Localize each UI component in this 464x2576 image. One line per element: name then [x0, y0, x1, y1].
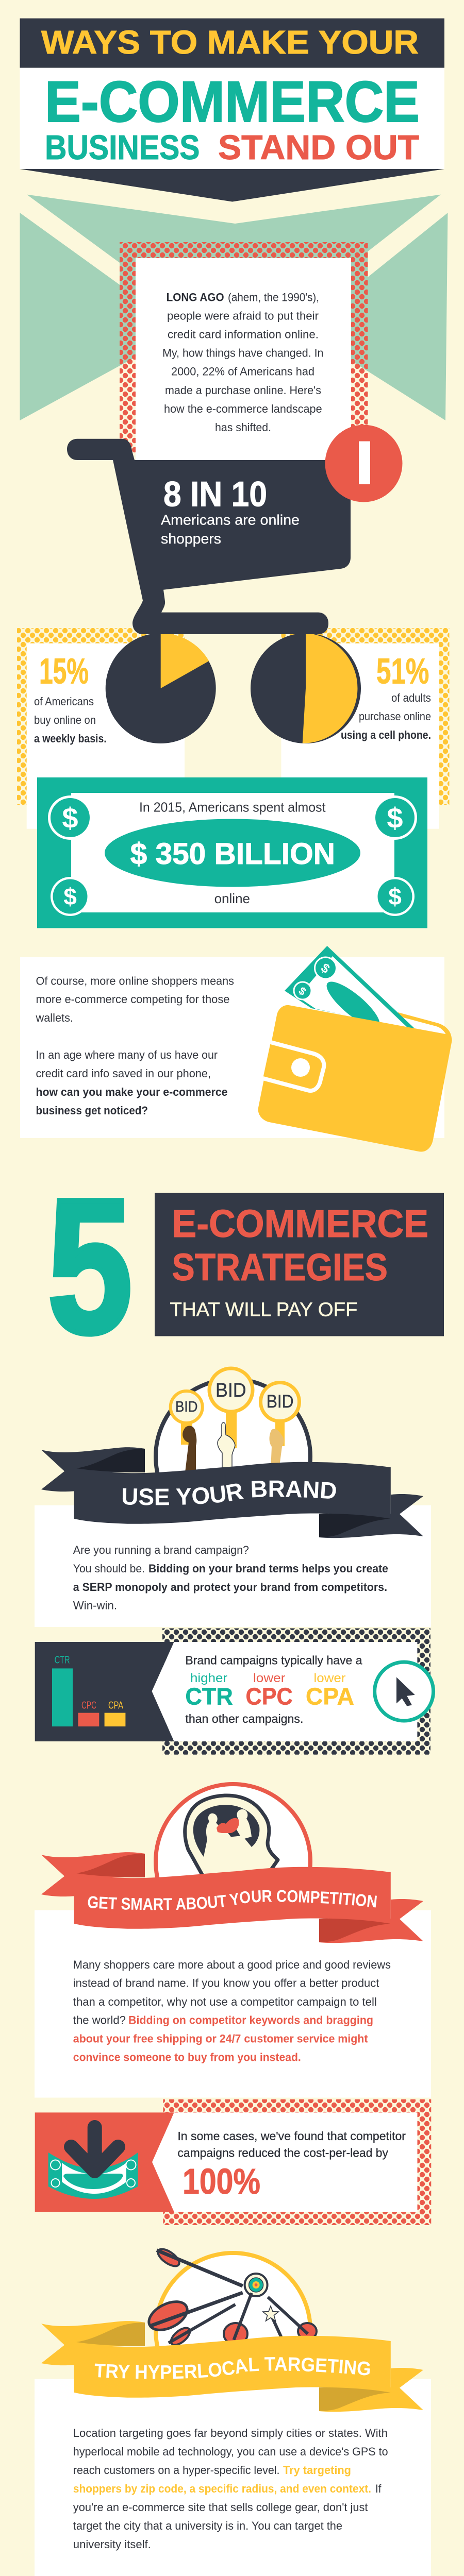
cart badge	[325, 425, 402, 502]
section 3 panel: hyperlocal: If	[375, 2482, 382, 2495]
stat: 51%: using a cell phone.	[341, 728, 431, 741]
icon: wallet with bill: $	[318, 960, 333, 976]
section 3 panel: hyperlocal: university itself.	[73, 2538, 151, 2551]
stat text: higher	[190, 1671, 227, 1685]
paddle: right: BID	[267, 1392, 294, 1412]
shopping cart	[67, 439, 351, 634]
bar chart: CPA	[108, 1700, 123, 1711]
section 3 ribbon	[41, 2321, 423, 2412]
section 1 panel: use your brand: a SERP monopoly and protect your brand from competitors.	[73, 1581, 387, 1594]
intro text: (ahem, the 1990's),	[228, 291, 319, 304]
stat text: lower	[313, 1671, 345, 1685]
arrows	[144, 2246, 317, 2348]
section 1 illustration: bid paddles	[156, 1368, 310, 1534]
stat text: than other campaigns.	[185, 1712, 303, 1725]
stat text	[185, 1654, 362, 1725]
section 1 panel: use your brand: Win-win.	[73, 1599, 117, 1612]
yellow dotted stat backdrop	[17, 628, 450, 829]
intro text: My, how things have changed. In	[162, 346, 324, 360]
numeral 5: 5	[47, 1159, 132, 1373]
corner seals: $	[387, 802, 403, 834]
heading: e-commerce strategies	[155, 1193, 444, 1336]
paragraph text: how can you make your e-commerce	[36, 1086, 228, 1098]
intro text: how the e-commerce landscape	[164, 402, 322, 415]
paddle: left	[171, 1391, 203, 1423]
section 1 ribbon	[41, 1447, 423, 1538]
section 2 illustration: head with couple	[156, 1784, 310, 1939]
ribbon title: TRY HYPERLOCAL TARGETING	[95, 2357, 370, 2379]
section 2 stat: 100%: In some cases, we've found that competitor	[177, 2129, 406, 2143]
paddle: right	[261, 1383, 299, 1421]
section 2 panel: get smart: instead of brand name. If you know you offer a better product	[73, 1976, 379, 1989]
dollar bill: $350 billion: online	[214, 891, 250, 906]
icon: wallet with bill	[258, 946, 452, 1152]
paddle: left: BID	[175, 1399, 198, 1415]
section 3 panel: hyperlocal: target the city that a university is in. You can target the	[73, 2519, 342, 2532]
corner seals: $	[388, 883, 402, 910]
section 3 illustration: arrows and target	[144, 2246, 317, 2408]
stat text: lower	[253, 1671, 285, 1685]
panel: more competition	[20, 957, 444, 1138]
bar chart: CPC	[81, 1700, 96, 1711]
dollar bill: $350 billion	[37, 777, 427, 928]
section 1 panel: use your brand: Are you running a brand campaign?	[73, 1544, 249, 1556]
stat text: Brand campaigns typically have a	[185, 1654, 362, 1667]
paragraph text: business get noticed?	[36, 1104, 148, 1117]
intro text: LONG AGO	[167, 291, 224, 304]
intro text: made a purchase online. Here's	[165, 384, 321, 397]
dollar bill: $350 billion: $ 350 BILLION	[130, 837, 335, 871]
stat: 15%: of Americans	[34, 695, 94, 708]
icon: cursor	[375, 1662, 434, 1721]
stat: 15%: 15%	[39, 651, 89, 691]
heading: e-commerce strategies: E-COMMERCE	[172, 1202, 428, 1245]
stat text: CPC	[245, 1683, 293, 1709]
paddle: middle: BID	[216, 1380, 246, 1401]
pie chart: 15%	[106, 633, 216, 743]
stat: 51%	[341, 651, 431, 741]
title line 1: WAYS TO MAKE YOUR	[41, 24, 419, 61]
paragraph text: In an age where many of us have our	[36, 1048, 218, 1061]
hands	[183, 1422, 284, 1472]
title line 2: E-COMMERCE	[45, 70, 420, 134]
corner seals: $	[63, 883, 77, 910]
intro text: 2000, 22% of Americans had	[171, 365, 314, 378]
section 2 panel: get smart: convince someone to buy from you instead.	[73, 2050, 301, 2063]
target	[245, 2274, 268, 2296]
section 2 panel: get smart: Many shoppers care more about a good price and good reviews	[73, 1958, 391, 1971]
title line 3b: STAND OUT	[218, 128, 419, 167]
cart caption	[161, 512, 300, 547]
section 2 panel: get smart: than a competitor, why not use a competitor campaign to tell	[73, 1995, 377, 2008]
stat: 15%	[34, 651, 107, 745]
stat text: CTR	[185, 1683, 233, 1709]
section 2 ribbon	[41, 1852, 423, 1943]
cart caption: shoppers	[161, 531, 221, 547]
green envelope ribbons	[20, 195, 448, 420]
section 3 panel: hyperlocal: reach customers on a hyper-specific level.	[73, 2464, 280, 2477]
paragraph text: more e-commerce competing for those	[36, 993, 230, 1006]
title line 3a: BUSINESS	[45, 128, 200, 167]
stat: 51%: purchase online	[359, 710, 431, 723]
section 3 panel: hyperlocal	[35, 2379, 431, 2576]
intro text: people were afraid to put their	[167, 309, 319, 323]
cart headline: 8 IN 10	[163, 474, 267, 514]
intro text	[162, 291, 324, 434]
section 2 panel: get smart	[35, 1910, 431, 2098]
intro text: credit card information online.	[168, 328, 319, 341]
paragraph text: credit card info saved in our phone,	[36, 1067, 211, 1080]
section 2 stat: 100%	[35, 2099, 431, 2225]
section 2 stat: 100%: 100%	[183, 2161, 260, 2201]
section 2 panel: get smart: the world?	[73, 2013, 126, 2026]
stat text: CPA	[306, 1683, 354, 1709]
paragraph text: wallets.	[36, 1011, 73, 1024]
cart caption: Americans are online	[161, 512, 300, 528]
paragraph text: Of course, more online shoppers means	[36, 974, 234, 987]
section 1 panel: use your brand: Bidding on your brand terms helps you create	[148, 1562, 388, 1575]
bar chart: CTR	[55, 1655, 70, 1666]
title banner	[20, 19, 444, 201]
intro card	[120, 242, 368, 460]
section 3 panel: hyperlocal: you're an e-commerce site that sells college gear, don't just	[73, 2501, 368, 2514]
corner seals: $	[62, 802, 78, 834]
stat: 51%: of adults	[391, 691, 431, 704]
dollar bill: $350 billion: In 2015, Americans spent almost	[139, 800, 326, 815]
section 3 panel: hyperlocal: Location targeting goes far beyond simply cities or states. With	[73, 2427, 388, 2439]
paddle handles	[181, 1412, 285, 1448]
section 3 panel: hyperlocal: hyperlocal mobile ad technology, you can use a device's GPS to	[73, 2445, 388, 2458]
section 2 panel: get smart: about your free shipping or 24/7 customer service might	[73, 2032, 368, 2045]
section 2 stat: 100%: campaigns reduced the cost-per-lead by	[177, 2146, 388, 2160]
section 3 panel: hyperlocal: shoppers by zip code, a specific radius, and even context.	[73, 2482, 371, 2495]
stat: 51%: 51%	[376, 651, 429, 691]
stat: 15%: a weekly basis.	[34, 732, 107, 745]
section 1 stat: CTR CPC CPA	[35, 1628, 434, 1755]
icon: falling cost	[48, 2127, 138, 2199]
bar chart	[52, 1655, 125, 1726]
section 2 panel: get smart: Bidding on competitor keywords and bragging	[128, 2013, 373, 2026]
paragraph text	[36, 974, 234, 1117]
icon: wallet with bill: $	[296, 985, 308, 998]
section 1 panel: use your brand	[35, 1505, 431, 1627]
section 1 panel: use your brand: You should be.	[73, 1562, 145, 1575]
ribbon title: USE YOUR BRAND	[123, 1481, 336, 1505]
paddle: middle	[209, 1368, 253, 1412]
corner seals	[48, 795, 417, 916]
heading: e-commerce strategies: THAT WILL PAY OFF	[170, 1299, 358, 1321]
pie chart: 51%	[251, 633, 361, 743]
ribbon title: GET SMART ABOUT YOUR COMPETITION	[88, 1890, 377, 1910]
intro text: has shifted.	[215, 421, 271, 434]
section 3 panel: hyperlocal: Try targeting	[283, 2464, 351, 2477]
stat: 15%: buy online on	[34, 714, 96, 726]
heading: e-commerce strategies: STRATEGIES	[172, 1246, 388, 1289]
